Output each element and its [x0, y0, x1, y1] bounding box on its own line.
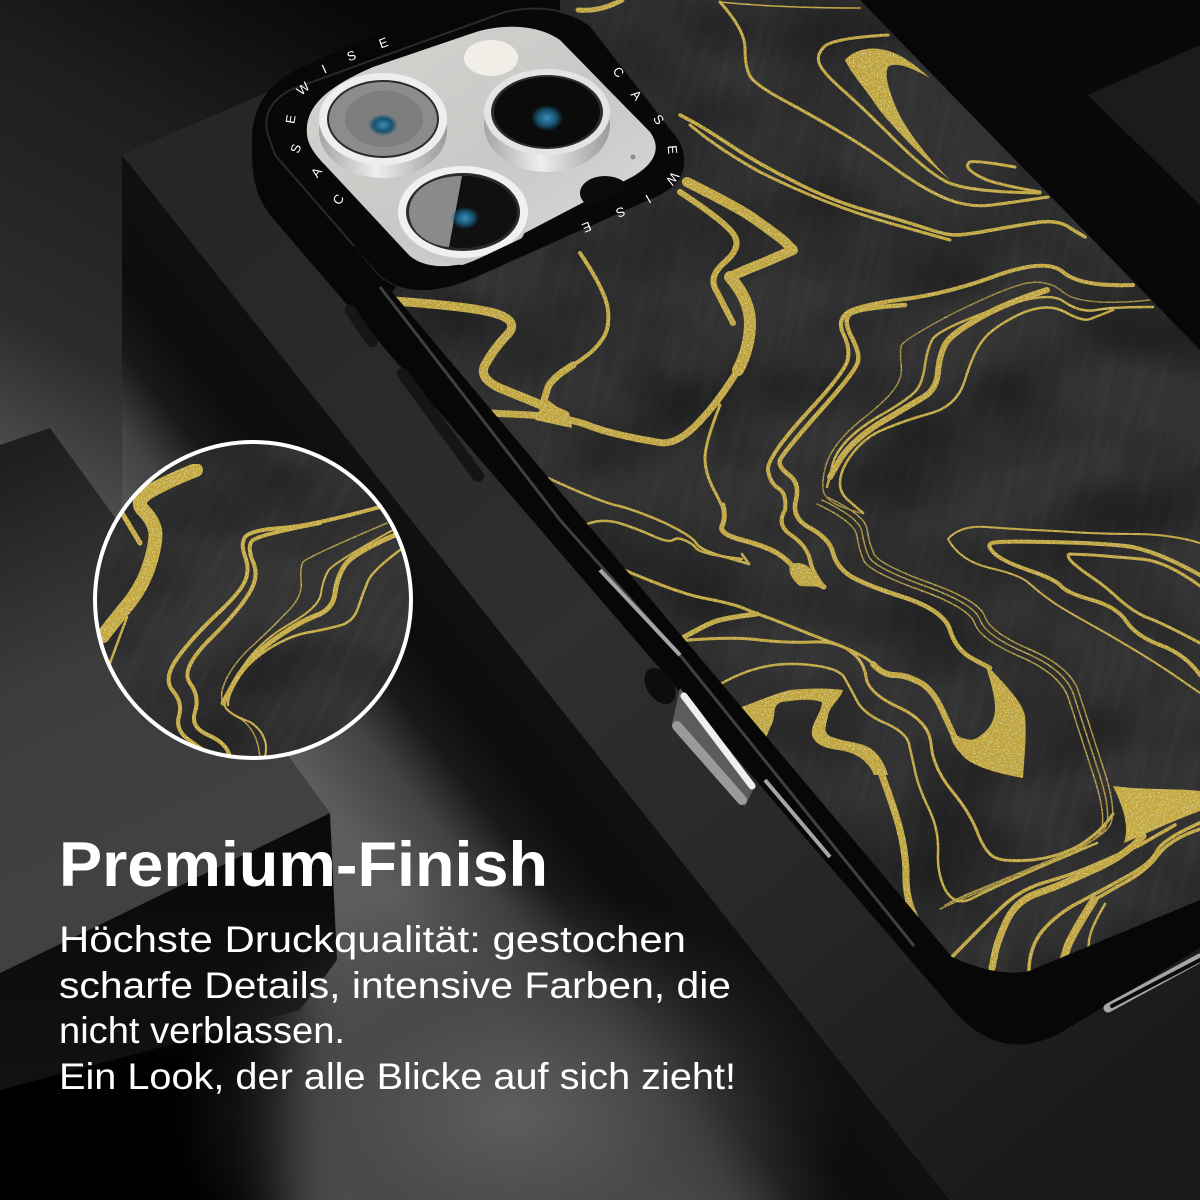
brand text: left: A — [308, 164, 325, 180]
bright edge highlight — [600, 570, 830, 857]
brand text: right: E — [580, 219, 594, 236]
body text: Ein Look, der alle Blicke auf sich zieht! — [59, 1056, 736, 1097]
left lower block front — [0, 813, 337, 1090]
brand text: left: I — [319, 61, 329, 76]
inset gold lines — [103, 470, 400, 757]
side button: silver lower — [677, 726, 742, 800]
brand text: left: W — [294, 78, 313, 98]
inset border — [95, 442, 411, 758]
brand text: right: I — [643, 191, 654, 206]
bottom port slot — [1112, 960, 1200, 1006]
brand text: right: C — [610, 64, 627, 81]
side button: silver body — [672, 688, 755, 806]
glossy edge highlight — [380, 287, 914, 946]
body text: scharfe Details, intensive Farben, die — [59, 965, 731, 1006]
lower shadow — [0, 985, 300, 1200]
brand text: right: S — [650, 112, 668, 128]
brand text: right: A — [628, 87, 645, 104]
inset blotch texture — [98, 444, 393, 756]
body text: nicht verblassen. — [59, 1010, 345, 1051]
back panel — [392, 0, 1200, 973]
gold blob: band end — [790, 563, 818, 587]
panel blotch texture — [392, 0, 1200, 972]
button recess — [638, 662, 682, 710]
zoom inset circle — [93, 440, 413, 760]
gold blob: lower left — [735, 688, 888, 775]
lit floor glow — [170, 885, 850, 1200]
lens top left — [319, 73, 447, 178]
gold marble pattern — [393, 0, 1200, 971]
brand text: right: E — [665, 145, 680, 155]
gold blob: upper band tip — [535, 398, 572, 428]
brand text: left: S — [287, 142, 304, 155]
brand text: right: W — [663, 169, 682, 189]
brand text: left — [282, 34, 390, 208]
inset streak texture — [0, 325, 541, 899]
camera ring — [266, 8, 685, 290]
main block side face — [0, 155, 950, 1200]
brand text: left: E — [377, 34, 390, 51]
bottom port — [1108, 958, 1200, 1008]
camera glass — [307, 27, 656, 266]
gold lines — [393, 0, 1200, 971]
brand text: left: S — [345, 47, 358, 64]
brand text: left: C — [329, 191, 347, 208]
phone body — [252, 0, 1200, 1044]
lidar sensor — [580, 176, 630, 210]
lens top right — [484, 69, 610, 172]
camera island — [266, 8, 685, 290]
brand text: right: S — [614, 204, 628, 221]
body text — [59, 919, 736, 1097]
gold blob: centre right — [950, 663, 1026, 778]
brand text: right — [580, 64, 682, 236]
gold blob: lower right — [1113, 786, 1200, 843]
heading: Premium-Finish — [59, 830, 548, 900]
side button: upper — [350, 310, 372, 342]
mic dot — [630, 154, 636, 160]
side button: volume — [403, 374, 478, 476]
gold blob: top right — [845, 49, 950, 180]
brand text: left: E — [282, 113, 299, 125]
lens bottom — [398, 166, 528, 265]
ring lower band — [352, 165, 675, 290]
block top right — [1088, 45, 1200, 205]
side button: silver upper — [684, 696, 752, 786]
flash — [464, 40, 518, 76]
body text: Höchste Druckqualität: gestochen — [59, 919, 686, 960]
phone — [252, 0, 1200, 1044]
left lower block top — [0, 428, 330, 973]
